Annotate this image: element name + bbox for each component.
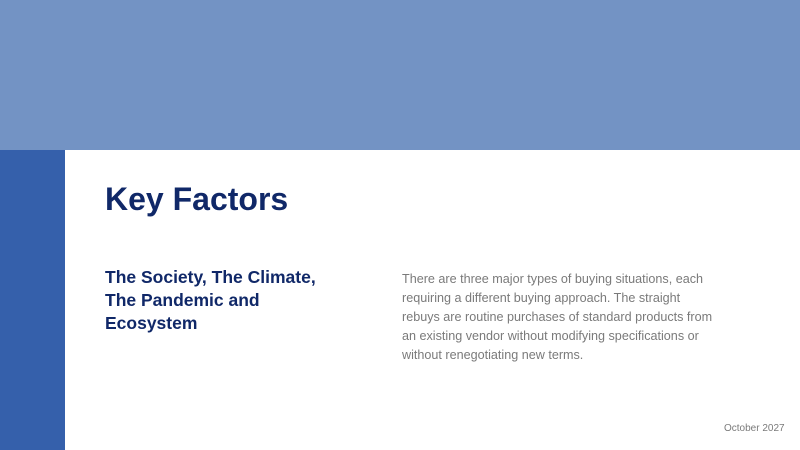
subtitle: Ecosystem [105, 313, 197, 333]
top band [0, 0, 800, 150]
subtitle [105, 267, 316, 333]
subtitle: The Pandemic and [105, 290, 260, 310]
subtitle: The Society, The Climate, [105, 267, 316, 287]
paragraph: There are three major types of buying situations, each requiring a different buying approach. The straight rebuys are routine purchases of standard products from an existing vendor without modifying specifications or without renegotiating new terms. [402, 272, 712, 362]
title: Key Factors [105, 181, 288, 217]
date: October 2027 [724, 423, 785, 434]
left bar [0, 150, 65, 450]
